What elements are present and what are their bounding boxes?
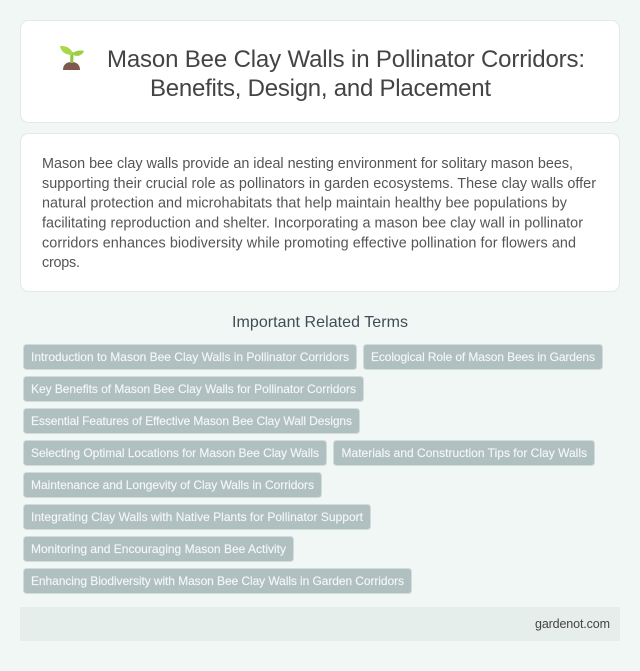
tag: key benefits	[24, 376, 364, 402]
icon: seedling	[60, 46, 84, 70]
tag: enhancing biodiversity	[24, 568, 412, 594]
tag: integrating: Integrating Clay Walls with Native Plants for Pollinator Support	[31, 510, 364, 524]
tag: introduction: Introduction to Mason Bee Clay Walls in Pollinator Corridors	[31, 350, 349, 364]
footer source: gardenot.com	[535, 617, 610, 631]
tag: selecting locations: Selecting Optimal Locations for Mason Bee Clay Walls	[31, 446, 319, 460]
panel: summary card	[20, 134, 620, 292]
summary text: natural protection and microhabitats that help maintain healthy bee populations by	[42, 196, 568, 212]
tag: introduction	[24, 344, 356, 370]
tag: essential features: Essential Features of Effective Mason Bee Clay Wall Designs	[31, 414, 352, 428]
tag: integrating	[24, 504, 370, 530]
summary text: Mason bee clay walls provide an ideal nesting environment for solitary mason bees,	[42, 156, 573, 172]
tag: key benefits: Key Benefits of Mason Bee Clay Walls for Pollinator Corridors	[31, 382, 356, 396]
tag: essential features	[24, 408, 360, 434]
tag: enhancing biodiversity: Enhancing Biodiversity with Mason Bee Clay Walls in Garden Corridors	[31, 574, 404, 588]
tag: monitoring: Monitoring and Encouraging Mason Bee Activity	[31, 542, 286, 556]
tag: maintenance: Maintenance and Longevity of Clay Walls in Corridors	[31, 478, 314, 492]
tag: maintenance	[24, 472, 322, 498]
tag: ecological role: Ecological Role of Mason Bees in Gardens	[371, 350, 595, 364]
panel: related term tags	[24, 344, 602, 594]
title: Mason Bee Clay Walls in Pollinator Corridors:	[107, 46, 585, 73]
summary text: crops.	[42, 255, 80, 271]
tag: selecting locations	[24, 440, 326, 466]
tag: ecological role	[364, 344, 602, 370]
summary text: corridors enhances biodiversity while promoting effective pollination for flowers and	[42, 236, 576, 252]
tag: monitoring	[24, 536, 294, 562]
heading: related terms: Important Related Terms	[232, 314, 408, 331]
panel: title card	[20, 20, 620, 122]
tag: materials: Materials and Construction Tips for Clay Walls	[342, 446, 587, 460]
title: Benefits, Design, and Placement	[150, 75, 491, 102]
footer	[20, 607, 620, 641]
summary text: facilitating reproduction and shelter. Incorporating a mason bee clay wall in pollinator	[42, 216, 583, 232]
summary text: supporting their crucial role as pollinators in garden ecosystems. These clay walls offer	[42, 176, 596, 192]
tag: materials	[334, 440, 594, 466]
title	[107, 46, 585, 102]
summary text	[42, 156, 596, 271]
